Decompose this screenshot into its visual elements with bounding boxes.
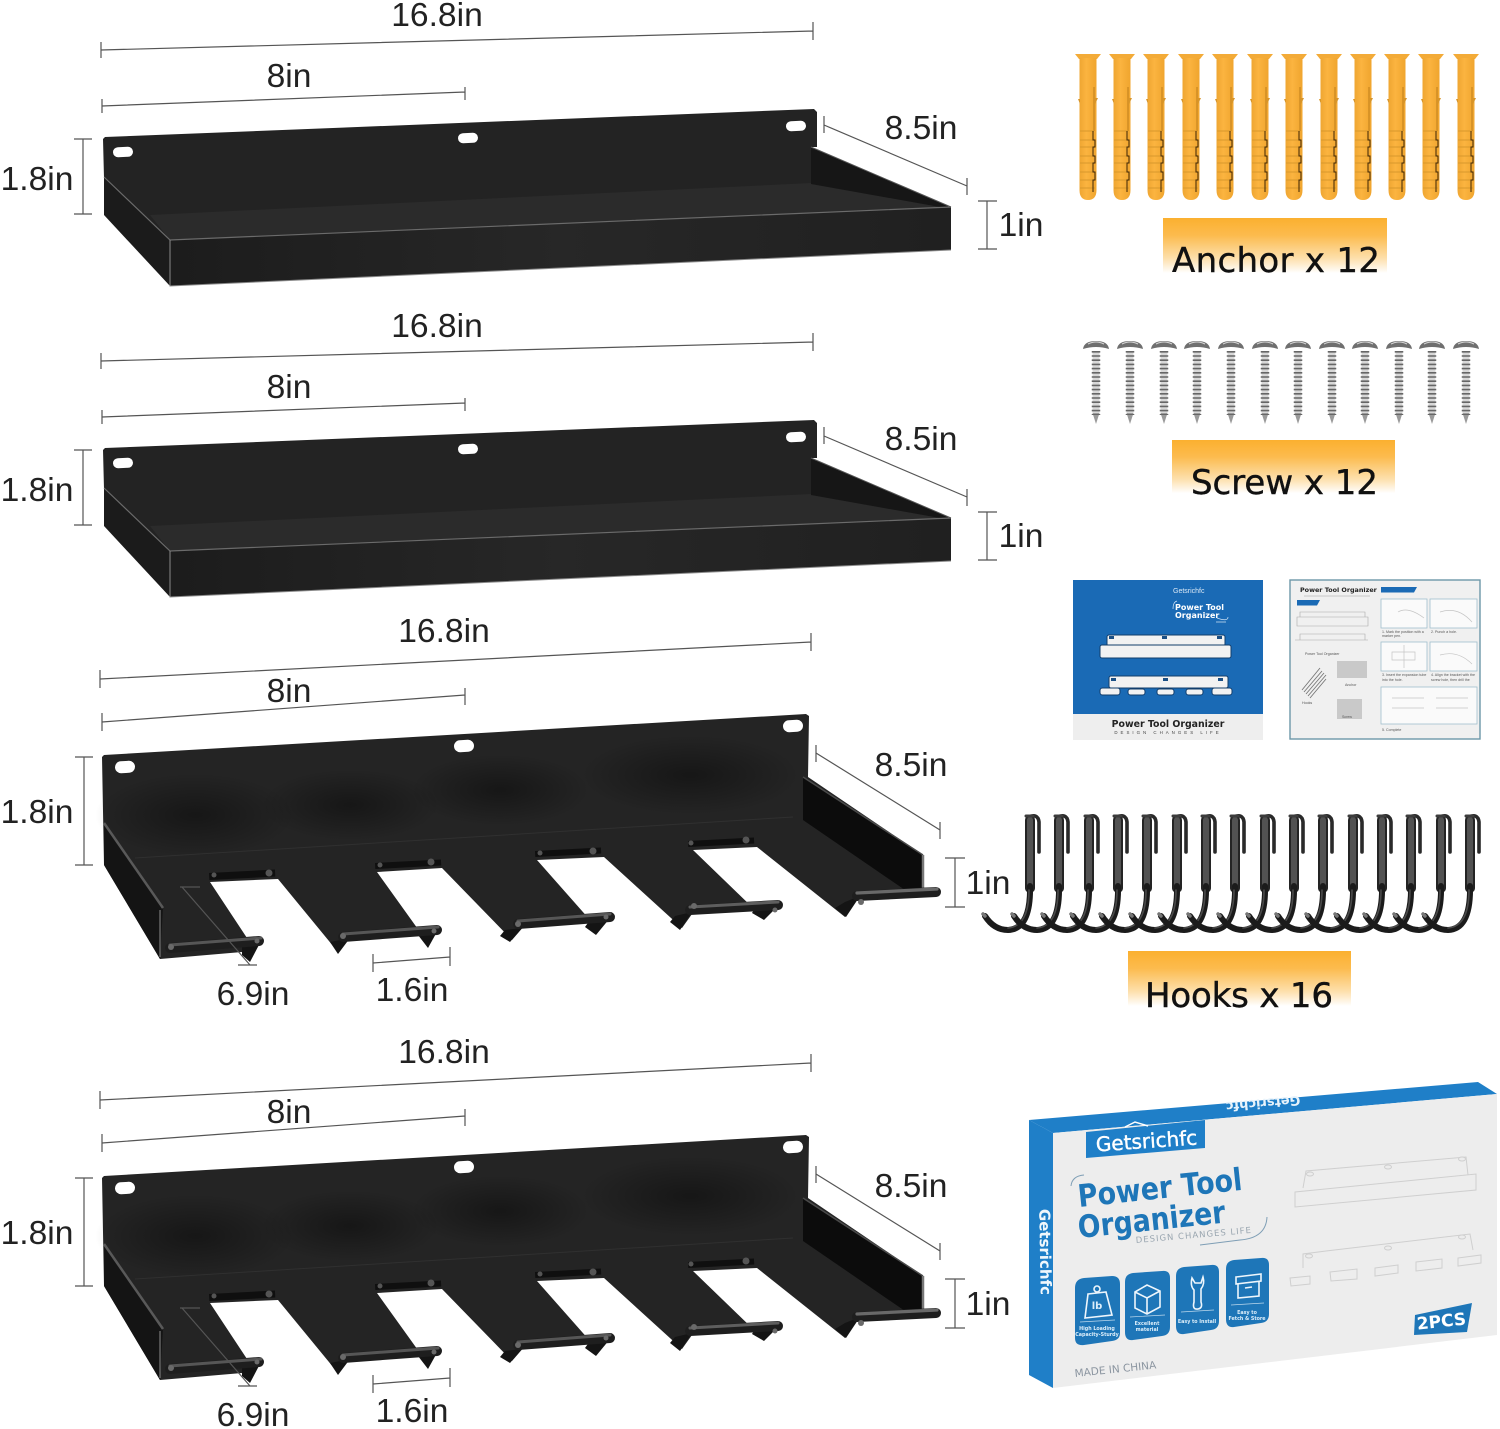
shelf 2: flat shelf with dimensions: [1, 308, 1043, 597]
shelf 4: slotted power tool rack with dimensions: 1.8in: [1, 1215, 73, 1252]
product retail box: Getsrichfc: [1225, 1092, 1301, 1113]
manual cover card: DESIGN CHANGES LIFE: [1114, 730, 1222, 735]
installation manual page: screw hole, then drill the: [1431, 678, 1470, 682]
manual cover card: Organizer: [1175, 611, 1219, 620]
product retail box: MADE IN CHINA: [1074, 1359, 1158, 1380]
installation manual page: Power Tool Organizer: [1300, 586, 1378, 594]
product retail box: lb: [1092, 1301, 1102, 1312]
label: screw count: [1172, 440, 1395, 503]
installation manual page: Hooks: [1302, 701, 1312, 705]
product retail box: Capacity-Sturdy: [1075, 1332, 1120, 1338]
manual cover card: Power Tool Organizer: [1112, 719, 1225, 730]
label: anchor count: [1163, 218, 1387, 281]
shelf 1: flat shelf with dimensions: 1.8in: [1, 161, 73, 198]
manual cover card: Getsrichfc: [1173, 588, 1205, 595]
manual cover card: Power Tool: [1175, 603, 1224, 612]
product retail box: material: [1136, 1327, 1159, 1333]
product retail box: Getsrichfc: [1095, 1126, 1198, 1157]
product retail box: Fetch & Store: [1228, 1316, 1266, 1322]
product retail box: Power Tool: [1076, 1162, 1244, 1215]
shelf 2: flat shelf with dimensions: 8.5in: [885, 421, 957, 458]
shelf 3: slotted power tool rack with dimensions: 8in: [267, 673, 311, 710]
shelf 2: flat shelf with dimensions: 1in: [999, 518, 1043, 555]
product retail box: 2PCS: [1416, 1310, 1467, 1335]
product retail box: [1029, 1082, 1497, 1388]
installation manual page: 1. Mark the position with a: [1382, 630, 1424, 634]
installation manual page: Anchor: [1345, 683, 1357, 687]
shelf 3: slotted power tool rack with dimensions: 1in: [966, 865, 1010, 902]
installation manual page: 4. Align the bracket with the: [1431, 673, 1475, 677]
shelf 4: slotted power tool rack with dimensions: 1in: [966, 1286, 1010, 1323]
shelf 1: flat shelf with dimensions: 8in: [267, 58, 311, 95]
shelf 4: slotted power tool rack with dimensions: 16.8in: [398, 1034, 490, 1071]
installation manual page: marker pen.: [1382, 634, 1401, 638]
product retail box: Easy to Install: [1178, 1319, 1216, 1325]
shelf 3: slotted power tool rack with dimensions: [1, 613, 1010, 1013]
shelf 2: flat shelf with dimensions: 1.8in: [1, 472, 73, 509]
shelf 3: slotted power tool rack with dimensions: 1.8in: [1, 794, 73, 831]
label: screw count: Screw x 12: [1191, 463, 1378, 503]
shelf 1: flat shelf with dimensions: 8.5in: [885, 110, 957, 147]
installation manual page: Screw: [1342, 715, 1352, 719]
shelf 1: flat shelf with dimensions: 1in: [999, 207, 1043, 244]
icon: row of 12 anchors: [1075, 54, 1479, 200]
icon: row of 16 hooks: [983, 816, 1479, 930]
shelf 4: slotted power tool rack with dimensions: [1, 1034, 1010, 1429]
shelf 1: flat shelf with dimensions: [1, 0, 1043, 286]
shelf 3: slotted power tool rack with dimensions: 16.8in: [398, 613, 490, 650]
shelf 4: slotted power tool rack with dimensions: 8in: [267, 1094, 311, 1131]
installation manual page: Power Tool Organizer: [1305, 652, 1340, 656]
product retail box: High Loading: [1079, 1326, 1115, 1332]
shelf 4: slotted power tool rack with dimensions: 1.6in: [376, 1393, 448, 1429]
shelf 3: slotted power tool rack with dimensions: 8.5in: [875, 747, 947, 784]
icon: row of 12 screws: [1083, 341, 1479, 424]
shelf 4: slotted power tool rack with dimensions: 8.5in: [875, 1168, 947, 1205]
installation manual page: 5. Complete: [1382, 728, 1401, 732]
manual cover card: [1073, 580, 1263, 740]
shelf 2: flat shelf with dimensions: 8in: [267, 369, 311, 406]
product retail box: Easy to: [1237, 1310, 1258, 1316]
shelf 2: flat shelf with dimensions: 16.8in: [391, 308, 483, 345]
label: hook count: Hooks x 16: [1145, 976, 1333, 1016]
shelf 3: slotted power tool rack with dimensions: 1.6in: [376, 972, 448, 1009]
label: hook count: [1128, 951, 1351, 1016]
label: anchor count: Anchor x 12: [1172, 241, 1380, 281]
installation manual page: 3. Insert the expansion tube: [1382, 673, 1426, 677]
shelf 3: slotted power tool rack with dimensions: 6.9in: [217, 976, 289, 1013]
installation manual page: into the hole.: [1382, 678, 1403, 682]
installation manual page: [1290, 580, 1480, 739]
installation manual page: 2. Punch a hole.: [1431, 630, 1457, 634]
product retail box: Getsrichfc: [1035, 1209, 1055, 1295]
product retail box: Organizer: [1076, 1195, 1228, 1246]
product retail box: DESIGN CHANGES LIFE: [1135, 1226, 1252, 1246]
product retail box: Excellent: [1135, 1321, 1160, 1327]
